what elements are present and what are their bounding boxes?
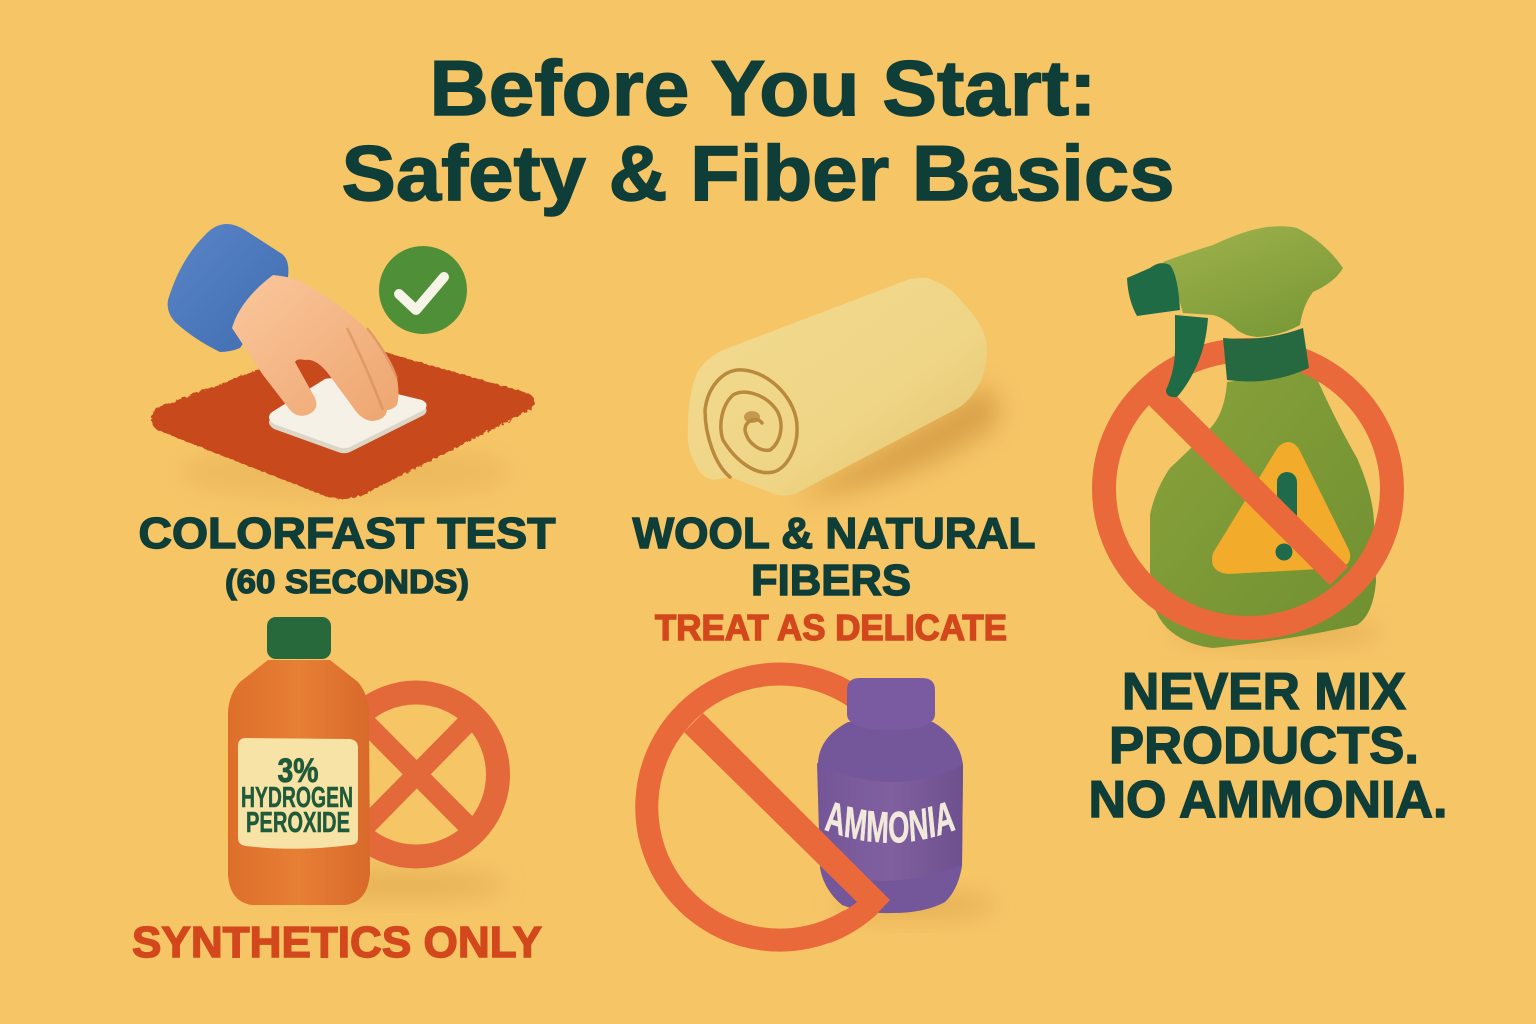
label: colorfast test: (60 SECONDS) — [225, 563, 469, 600]
prohibition bar — [684, 713, 890, 943]
prohibition ring — [1104, 350, 1392, 628]
cross sign — [334, 692, 498, 856]
label: never mix products: NO AMMONIA. — [1088, 771, 1448, 829]
icon: green check badge — [379, 246, 467, 334]
label: never mix products: PRODUCTS. — [1109, 717, 1419, 775]
label: never mix products — [1088, 663, 1448, 829]
towel body — [688, 278, 987, 496]
label: synthetics only: SYNTHETICS ONLY — [132, 918, 542, 967]
title: Before You Start: — [430, 44, 1096, 132]
prohibition ring — [647, 674, 860, 940]
title: Safety & Fiber Basics — [342, 129, 1174, 217]
bottle label: PEROXIDE — [246, 807, 350, 839]
label: wool and natural fibers: FIBERS — [751, 556, 911, 605]
white cloth — [269, 378, 427, 453]
icon: ammonia bottle with prohibition sign — [635, 662, 982, 952]
bottle body — [1150, 370, 1376, 648]
label: never mix products: NEVER MIX — [1122, 663, 1406, 721]
icon: hydrogen peroxide bottle with cross sign — [228, 617, 505, 905]
label: wool and natural fibers: WOOL & NATURAL — [632, 509, 1036, 558]
icon: spray bottle with prohibition sign — [1104, 226, 1392, 648]
bottle label: HYDROGEN — [241, 782, 353, 814]
carpet — [151, 340, 535, 499]
label: colorfast test — [138, 509, 556, 600]
label: wool and natural fibers — [632, 509, 1036, 648]
label: colorfast test: COLORFAST TEST — [138, 509, 556, 558]
hand — [232, 275, 398, 421]
label: wool and natural fibers: TREAT AS DELICATE — [655, 607, 1007, 648]
purple bottle — [817, 678, 963, 914]
towel spiral end — [705, 370, 797, 477]
blue cuff — [168, 224, 288, 352]
title — [342, 44, 1174, 217]
bottle label — [238, 738, 358, 849]
bottle label: 3% — [278, 752, 318, 790]
icon: hand pressing white cloth on red carpet — [151, 224, 535, 499]
spray head — [1127, 226, 1343, 397]
warning triangle — [1212, 442, 1350, 574]
icon: rolled wool towel — [688, 278, 999, 498]
purple bottle: AMMONIA — [824, 802, 956, 843]
green cap — [267, 617, 331, 659]
orange bottle — [228, 660, 370, 905]
